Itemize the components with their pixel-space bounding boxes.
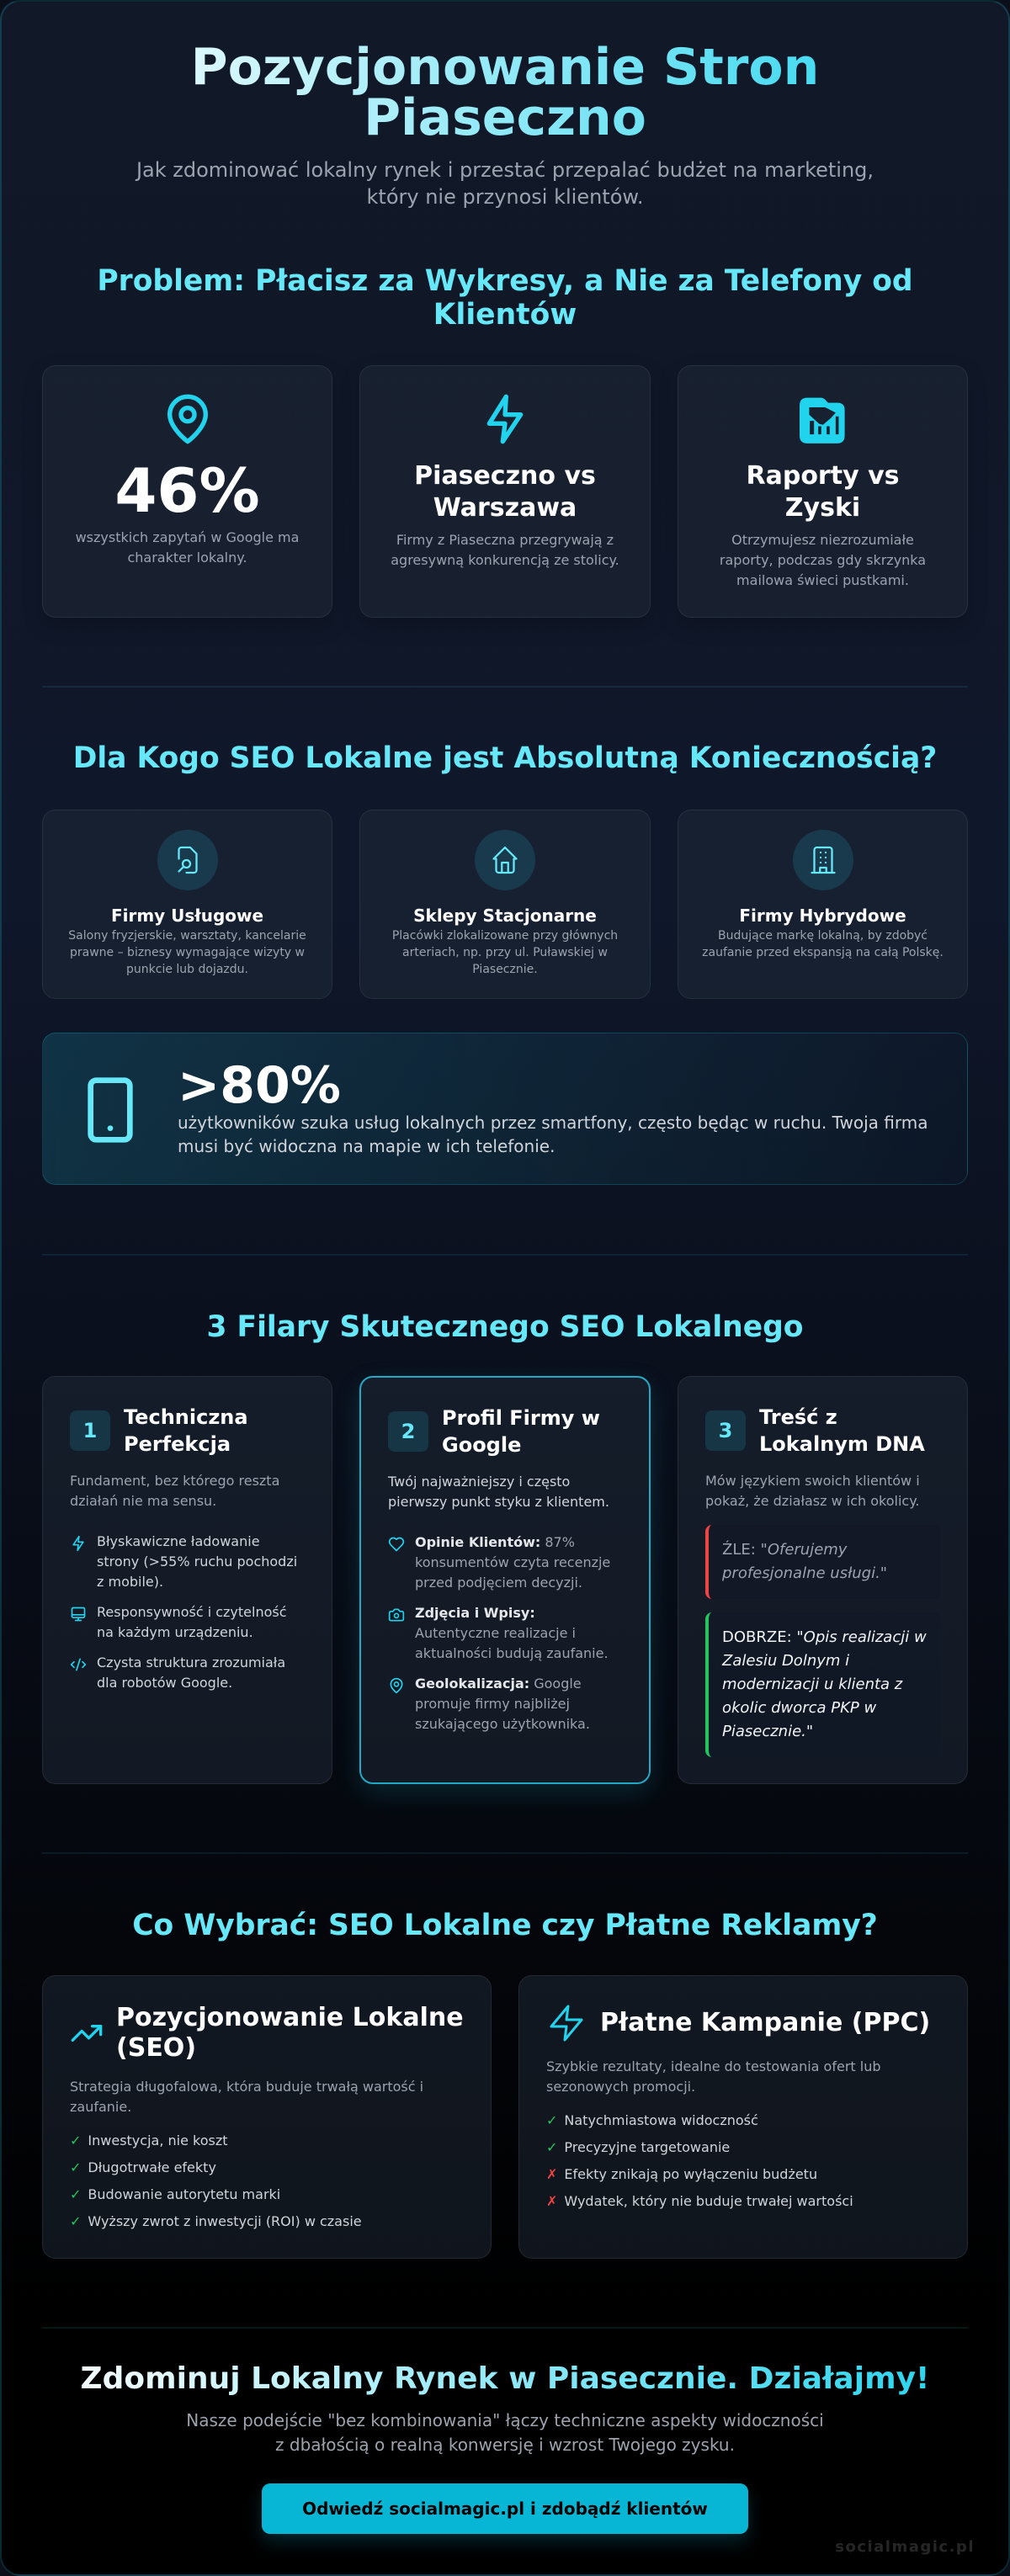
- pillar description: [388, 1472, 622, 1512]
- pillar header: Techniczna: [124, 1405, 248, 1429]
- callout: good example: [705, 1612, 940, 1757]
- panel description: [546, 2057, 940, 2097]
- pillar description: działań nie ma sensu.: [70, 1493, 216, 1509]
- benefit list: Budowanie autorytetu marki: [88, 2186, 280, 2202]
- list item: photos: Autentyczne realizacje i: [415, 1625, 576, 1641]
- pros and cons list: Natychmiastowa widoczność: [564, 2112, 758, 2128]
- list item: reviews: konsumentów czyta recenzje: [415, 1554, 610, 1570]
- icon: lightning: [486, 394, 524, 444]
- panel: SEO: [42, 1975, 492, 2259]
- card description: [720, 532, 926, 588]
- list item: reviews: przed podjęciem decyzji.: [415, 1575, 582, 1591]
- pillar header: [705, 1404, 940, 1458]
- list item: geolocation: [388, 1674, 622, 1734]
- panel: service firms: [42, 810, 332, 999]
- card description: Salony fryzjerskie, warsztaty, kancelarie: [68, 929, 306, 943]
- pillar header: 3: [719, 1419, 732, 1442]
- panel: pillar 2 highlighted: [359, 1376, 651, 1784]
- subtitle: Jak zdominować lokalny rynek i przestać przepalać budżet na marketing,: [136, 158, 874, 182]
- panel description: sezonowych promocji.: [546, 2079, 695, 2095]
- heading: comparison: Co Wybrać: SEO Lokalne czy Płatne Reklamy?: [132, 1909, 878, 1942]
- icon: map pin: [167, 394, 208, 444]
- watermark: socialmagic.pl: [835, 2538, 975, 2556]
- closing text: [42, 2409, 968, 2457]
- card heading: Firmy Hybrydowe: [739, 906, 906, 926]
- pillar description: [70, 1473, 279, 1509]
- list item: photos: aktualności budują zaufanie.: [415, 1645, 609, 1661]
- list item: speed: strony (>55% ruchu pochodzi: [97, 1554, 297, 1570]
- list item: speed: [72, 1533, 297, 1590]
- title: Piaseczno: [364, 88, 646, 147]
- heading: pillars: 3 Filary Skutecznego SEO Lokalnego: [206, 1310, 804, 1344]
- card description: [702, 929, 944, 959]
- panel: retail shops: [359, 810, 651, 999]
- panel header: [70, 2003, 464, 2063]
- heading: call to action: Zdominuj Lokalny Rynek w Piasecznie. Działajmy!: [81, 2361, 929, 2396]
- callout: good example: okolic dworca PKP w: [722, 1699, 876, 1717]
- callout: good example: Piasecznie.": [722, 1723, 813, 1740]
- pillar description: Twój najważniejszy i często: [388, 1474, 570, 1490]
- subtitle: który nie przynosi klientów.: [367, 185, 643, 209]
- card description: punkcie lub dojazdu.: [126, 963, 248, 976]
- card heading: Piaseczno vs: [414, 461, 596, 491]
- list item: code: dla robotów Google.: [97, 1675, 232, 1691]
- card description: raporty, podczas gdy skrzynka: [720, 552, 926, 568]
- list item: geolocation: Geolokalizacja: Google: [415, 1676, 582, 1692]
- subtitle: [135, 158, 874, 209]
- panel: Piaseczno vs Warszawa: [359, 365, 651, 618]
- stat number: 46%: [114, 455, 260, 526]
- pros and cons list: ✓: [546, 2112, 557, 2128]
- pros and cons list: [546, 2111, 940, 2212]
- card description: [391, 532, 619, 568]
- pillar header: Google: [442, 1433, 521, 1457]
- list item: code: [70, 1653, 305, 1693]
- panel: 46% stat: [42, 365, 332, 618]
- stat description: użytkowników szuka usług lokalnych przez smartfony, często będąc w ruchu. Twoja firma: [178, 1113, 928, 1133]
- panel description: Strategia długofalowa, która buduje trwałą wartość i: [70, 2079, 423, 2095]
- heading: target audience: Dla Kogo SEO Lokalne jest Absolutną Koniecznością?: [73, 741, 937, 775]
- card description: Piasecznie.: [472, 963, 538, 976]
- panel heading: [116, 2003, 464, 2063]
- callout: good example: Zalesiu Dolnym i: [722, 1652, 849, 1670]
- card description: [392, 929, 618, 976]
- pillar description: Mów językiem swoich klientów i: [705, 1473, 920, 1489]
- closing text: Nasze podejście "bez kombinowania" łączy techniczne aspekty widoczności: [186, 2410, 824, 2430]
- list item: speed: z mobile).: [97, 1574, 163, 1590]
- callout: good example: DOBRZE: "Opis realizacji w: [722, 1628, 927, 1646]
- pillar description: Fundament, bez którego reszta: [70, 1473, 279, 1489]
- list item: reviews: [388, 1532, 622, 1593]
- button: visit site: [262, 2483, 748, 2534]
- pillar header: Treść z: [759, 1405, 837, 1429]
- pros and cons list: ✓: [546, 2139, 557, 2155]
- list item: reviews: Opinie Klientów: 87%: [415, 1534, 575, 1550]
- card heading: Zyski: [785, 493, 860, 523]
- list item: geolocation: szukającego użytkownika.: [415, 1716, 590, 1732]
- card description: Placówki zlokalizowane przy głównych: [392, 929, 618, 943]
- card description: arteriach, np. przy ul. Puławskiej w: [402, 946, 608, 959]
- panel description: Szybkie rezultaty, idealne do testowania ofert lub: [546, 2058, 880, 2074]
- stat description: charakter lokalny.: [127, 550, 247, 566]
- callout: bad example: [705, 1525, 940, 1599]
- benefit list: [70, 2131, 464, 2232]
- list item: photos: Zdjęcia i Wpisy:: [415, 1605, 535, 1621]
- stat description: musi być widoczna na mapie w ich telefonie.: [178, 1136, 555, 1156]
- stat description: wszystkich zapytań w Google ma: [76, 529, 299, 545]
- card description: Budujące markę lokalną, by zdobyć: [718, 929, 928, 943]
- heading: problem: Klientów: [433, 298, 577, 332]
- title: Pozycjonowanie Stron: [191, 38, 819, 97]
- panel: hybrid firms: [678, 810, 968, 999]
- callout: bad example: ŹLE: "Oferujemy: [722, 1541, 847, 1559]
- pillar header: Lokalnym DNA: [759, 1432, 925, 1456]
- pillar description: [705, 1471, 940, 1511]
- heading: problem: [97, 264, 913, 332]
- panel description: zaufanie.: [70, 2099, 131, 2115]
- icon: report chart: [800, 397, 845, 443]
- card description: [68, 929, 306, 976]
- card description: prawne – biznesy wymagające wizyty w: [70, 946, 305, 959]
- card heading: Firmy Usługowe: [111, 906, 263, 926]
- callout: bad example: profesjonalne usługi.": [722, 1564, 887, 1582]
- card description: zaufanie przed ekspansją na całą Polskę.: [702, 946, 944, 959]
- panel header: [546, 2003, 940, 2043]
- list item: responsive: na każdym urządzeniu.: [97, 1624, 253, 1640]
- benefit list: ✓: [70, 2186, 81, 2202]
- pros and cons list: ✗: [546, 2193, 557, 2209]
- list item: photos: [388, 1603, 622, 1664]
- card description: Otrzymujesz niezrozumiałe: [731, 532, 914, 548]
- panel heading: Pozycjonowanie Lokalne: [116, 2003, 464, 2032]
- pillar description: pierwszy punkt styku z klientem.: [388, 1494, 609, 1510]
- benefit list: Długotrwałe efekty: [88, 2159, 216, 2175]
- panel heading: (SEO): [116, 2033, 196, 2063]
- list item: code: Czysta struktura zrozumiała: [97, 1654, 285, 1670]
- pros and cons list: Efekty znikają po wyłączeniu budżetu: [564, 2166, 817, 2182]
- title: [191, 38, 819, 147]
- panel: Raporty vs Zyski: [678, 365, 968, 618]
- benefit list: ✓: [70, 2213, 81, 2229]
- icon: trending up: [70, 2016, 104, 2050]
- card description: mailowa świeci pustkami.: [736, 572, 909, 588]
- card description: agresywną konkurencją ze stolicy.: [391, 552, 619, 568]
- pillar header: [70, 1405, 248, 1456]
- icon: lightning: [546, 2003, 587, 2043]
- pros and cons list: Precyzyjne targetowanie: [564, 2139, 730, 2155]
- pillar description: pokaż, że działasz w ich okolicy.: [705, 1493, 919, 1509]
- pillar header: 1: [83, 1419, 97, 1442]
- benefit list: Wyższy zwrot z inwestycji (ROI) w czasie: [88, 2213, 362, 2229]
- icon: file search: [157, 830, 217, 890]
- pros and cons list: Wydatek, który nie buduje trwałej wartości: [564, 2193, 853, 2209]
- stat description: [178, 1113, 928, 1156]
- pros and cons list: ✗: [546, 2166, 557, 2182]
- panel: pillar 3: [678, 1376, 968, 1784]
- panel description: [70, 2077, 464, 2117]
- pillar header: Profil Firmy w: [442, 1406, 600, 1430]
- stat number: >80%: [178, 1056, 341, 1115]
- list item: responsive: Responsywność i czytelność: [97, 1604, 287, 1620]
- panel heading: Płatne Kampanie (PPC): [600, 2008, 930, 2037]
- pillar header: [388, 1405, 622, 1458]
- panel: PPC: [518, 1975, 968, 2259]
- card heading: Warszawa: [433, 493, 577, 523]
- card description: Firmy z Piaseczna przegrywają z: [396, 532, 614, 548]
- list item: speed: Błyskawiczne ładowanie: [97, 1533, 260, 1549]
- panel: pillar 1: [42, 1376, 332, 1784]
- icon: smartphone: [88, 1077, 133, 1143]
- benefit list: ✓: [70, 2159, 81, 2175]
- pillar header: 2: [401, 1420, 415, 1443]
- callout: good example: modernizacji u klienta z: [722, 1676, 902, 1693]
- card heading: [414, 461, 596, 523]
- closing text: z dbałością o realną konwersję i wzrost Twojego zysku.: [275, 2435, 735, 2455]
- card heading: [746, 461, 899, 523]
- pillar header: Perfekcja: [124, 1432, 231, 1456]
- list item: responsive: [70, 1602, 305, 1643]
- icon: office building: [793, 830, 853, 890]
- button: visit site: Odwiedź socialmagic.pl i zdobądź klientów: [302, 2499, 708, 2519]
- benefit list: ✓: [70, 2133, 81, 2148]
- icon: house: [475, 830, 535, 890]
- card heading: Raporty vs: [746, 461, 899, 491]
- callout: mobile stat banner: [42, 1033, 968, 1185]
- heading: problem: Problem: Płacisz za Wykresy, a Nie za Telefony od: [97, 264, 913, 298]
- list item: geolocation: promuje firmy najbliżej: [415, 1696, 570, 1712]
- stat description: [76, 529, 299, 566]
- card heading: Sklepy Stacjonarne: [413, 906, 597, 926]
- benefit list: Inwestycja, nie koszt: [88, 2133, 227, 2148]
